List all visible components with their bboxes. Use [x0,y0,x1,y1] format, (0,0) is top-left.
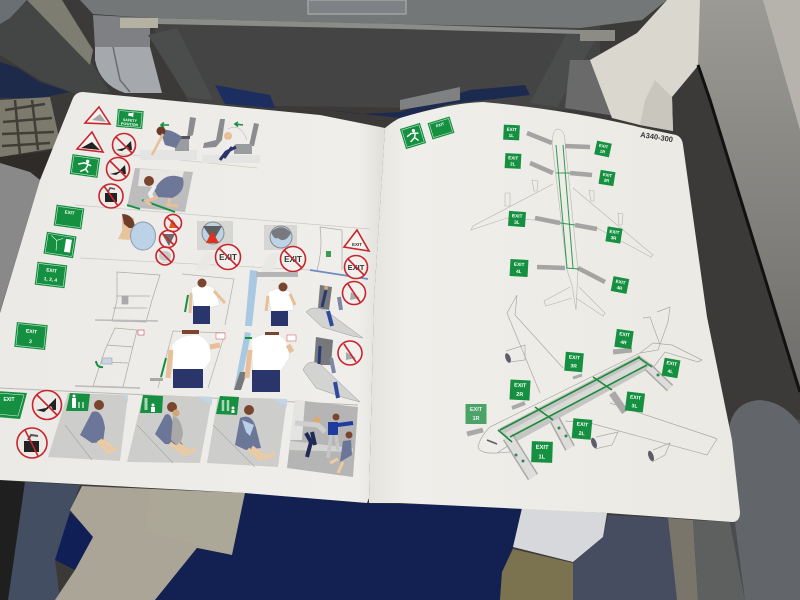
exit label 2R, perspective: 2R [516,392,523,398]
grey fabric on left seat [0,163,40,312]
exit label 1L: 1L [509,133,514,138]
navy blanket [155,493,522,600]
icon: no fire [164,214,182,232]
arm diagonals [148,28,213,100]
sign: EXIT 3: 3 [29,339,32,345]
exit label 3L, perspective: 3L [631,403,638,410]
illustration: door 1,2,4 closed [95,272,160,322]
exit label 3R: 3R [610,235,617,241]
exit label 1R: 1R [599,148,606,154]
illustration: evacuation slide 3 [303,337,362,402]
icon: safety position sign: SAFETY [123,118,138,123]
icon: warning triangle, land [77,132,103,152]
exit label 3R, perspective: EXIT [569,355,580,361]
icon: warning triangle, water [85,107,110,124]
tray hinge, cylinder [95,47,162,93]
exit label 4L, perspective: EXIT [666,360,678,368]
icon: safety position sign [116,109,144,129]
illustration: brace position, leaning forward [140,117,197,160]
panel: adult holding child on slide [127,395,212,463]
illustration: door 3 closed [75,328,144,388]
exit label 2R, perspective [509,379,531,401]
exit label 2R [598,170,616,186]
exit label 3L [508,211,526,227]
exit label 1L: EXIT [507,127,517,132]
card: right page [369,102,740,522]
illustration: evacuation slide 1,2,4 [306,282,366,338]
exit label 4R: EXIT [615,279,626,286]
exit label 4R, perspective: EXIT [619,331,630,339]
illustration: door with warning, no exit: EXIT [352,242,362,247]
icon: no baggage, large [17,428,47,458]
exit label 1L, perspective: EXIT [536,445,549,451]
icon: safety position sign: POSITION [121,122,139,127]
exit label 2L, perspective: 2L [578,431,586,437]
exit label 4L, perspective: 4L [667,368,674,375]
evacuees on slides [514,374,660,462]
illustration: window with fire, no exit: EXIT [219,253,237,262]
exit label 1R [594,141,612,157]
exit label 3R [605,226,623,244]
navy blanket small [55,512,95,570]
exit label 2L: 2L [510,161,516,167]
white cloth [590,0,708,131]
panel: adult holding infant on slide [207,396,287,467]
tray hinge, dark block [93,15,150,47]
exit label 1L, perspective [531,441,553,463]
icon: no smoke [160,230,176,248]
exit label 1R: EXIT [599,143,609,150]
illustration: opening door 1,2,4 [182,274,234,325]
exit label 4L [510,259,528,277]
slides [467,350,670,477]
mesh seat panel [698,0,800,392]
sign: EXIT row 5 [0,391,27,419]
exit label 3L: 3L [514,220,520,225]
exit label 2L, perspective [572,418,592,440]
left strut and shadow [0,0,110,95]
sign: EXIT row 5: EXIT [3,397,15,403]
exit label 2L, perspective: EXIT [576,422,589,429]
sign: door open [43,232,77,258]
illustration: brace position, upright [202,119,260,163]
outline of aircraft [478,295,717,462]
sign: EXIT 3: EXIT [26,328,37,336]
panel: adult alone on slide [48,393,128,461]
seatback behind the tray [150,20,600,110]
card: left page [0,92,385,503]
cabin floor [498,355,654,444]
diagram: aircraft in perspective [467,295,717,477]
icon: no baggage [99,184,123,208]
cloth shadow [565,60,615,116]
icon: no debris [156,247,174,265]
exit label 4R [611,276,629,294]
exit label 3R, perspective [564,352,584,372]
left page dividers [0,153,370,405]
illustration: crouching under smoke [127,168,193,212]
slides [527,133,605,282]
illustration: window with water, no exit [260,225,306,272]
icon: adult and child pictogram [140,395,163,413]
illustration: door 1,2,4 opened [245,270,298,326]
beige cloth [55,486,245,600]
exit label 4L: EXIT [514,262,525,268]
icon: adult and infant pictogram [216,396,239,415]
bottom-left dark strip [0,480,25,600]
exit label 4R: 4R [616,285,623,291]
illustration: person looking out of window [118,214,156,250]
icon: no high heels, large [32,390,62,420]
sign: EXIT [54,205,84,229]
sign: EXIT [428,117,454,139]
illustration: opening door 3 [150,330,225,388]
sign: EXIT 1,2,4: EXIT [46,267,57,275]
sign: EXIT: EXIT [435,122,445,128]
exit label 2R, perspective: EXIT [514,383,527,389]
illustration: door with warning, no exit [310,227,369,279]
exit label 3L, perspective: EXIT [630,394,641,402]
sign: EXIT 1,2,4: 1, 2, 4 [43,276,58,284]
right seat side panels [668,518,698,600]
sign: EXIT 3 [14,322,48,350]
exit label 3L: EXIT [512,213,523,219]
exit label 4L: 4L [516,269,522,275]
sign: running man [400,123,426,149]
aisles [556,145,579,269]
illustration: window with fire, no exit [195,221,240,270]
sign: EXIT 1,2,4 [35,262,67,288]
exit label 3L, perspective [625,391,645,413]
blue mesh seat left [8,482,80,600]
exit label 1R, perspective: EXIT [470,407,483,413]
exit label 2L: EXIT [508,155,519,161]
newspaper [0,97,60,157]
sign: EXIT: EXIT [64,209,75,216]
icon: adult pictogram [66,393,90,411]
icon: emergency exit running man sign [70,154,100,178]
illustration: door with warning, no exit: EXIT [348,263,365,272]
panel: evacuees running away [287,400,358,477]
white cloth bottom [513,508,607,562]
illustration: door 3 opened [234,332,296,392]
wings and fuselage outline [471,129,653,316]
icon: no high heels [112,134,136,156]
exit label 1R, perspective [466,404,486,424]
exit label 4R, perspective [614,329,634,349]
tan cloth [500,549,573,600]
engines [487,352,655,462]
armrest [728,400,800,600]
exit label 1L [503,125,520,140]
exit label 4L, perspective [662,358,680,378]
aircraft type label: A340-300 [640,130,674,144]
diagram: aircraft from above [471,129,653,316]
exit label 2R: 2R [604,178,610,183]
exit label 2R: EXIT [602,172,613,178]
exit label 4R, perspective: 4R [620,340,627,346]
illustration: window with water, no exit: EXIT [284,255,302,264]
icon: no high heels [106,158,130,180]
exit label 3R: EXIT [609,229,620,235]
green aisles [498,357,652,442]
exit label 3R, perspective: 3R [570,363,577,370]
tray latch [308,0,406,14]
blue mesh seat right [573,515,677,600]
seat pocket contents [215,85,275,108]
exit label 1R, perspective: 1R [472,416,480,422]
exit label 1L, perspective: 1L [538,454,546,461]
tray table [80,0,667,28]
exit label 2L [505,153,521,169]
